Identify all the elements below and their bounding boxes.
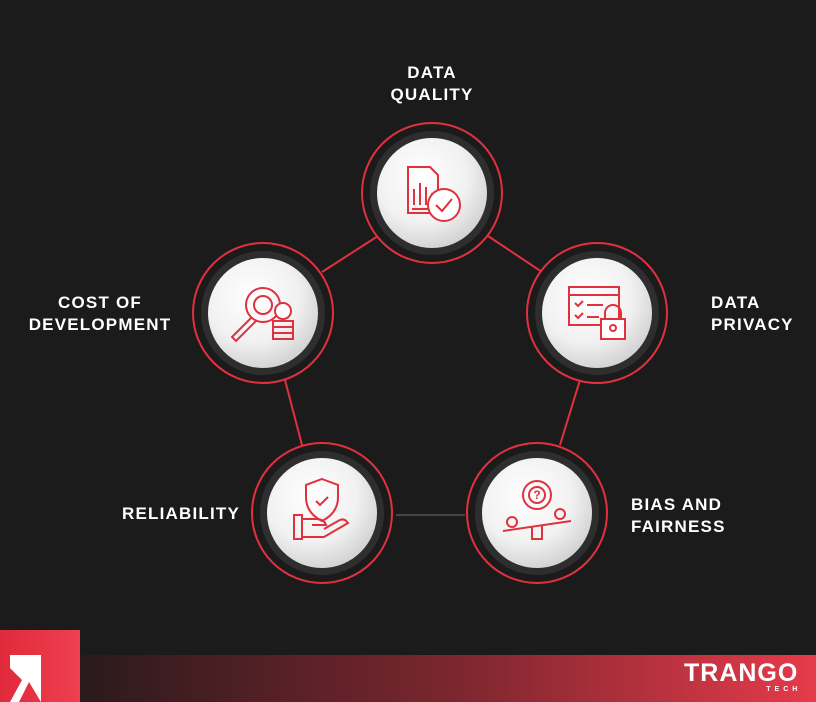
node: cost of development [193,243,333,383]
brand: trango tech: TECH [766,686,801,693]
label: data quality [390,63,474,104]
label: data quality: QUALITY [390,85,474,104]
node: bias and fairness: ? [533,488,541,502]
connectors [285,236,580,515]
node: bias and fairness [467,443,607,583]
footer bar [80,655,816,702]
label: data privacy: PRIVACY [711,315,794,334]
label: cost of development: COST OF [58,293,142,312]
label: cost of development [29,293,171,334]
label: reliability: RELIABILITY [122,504,240,523]
node: data quality [362,123,502,263]
logo square [0,630,80,702]
node: data privacy [527,243,667,383]
label: data privacy [711,293,794,334]
label: bias and fairness [631,495,726,536]
node: reliability [252,443,392,583]
label: bias and fairness: BIAS AND [631,495,722,514]
label: cost of development: DEVELOPMENT [29,315,171,334]
brand: trango tech: TRANGO [684,659,798,687]
label: data quality: DATA [407,63,457,82]
label: bias and fairness: FAIRNESS [631,517,726,536]
label: data privacy: DATA [711,293,760,312]
